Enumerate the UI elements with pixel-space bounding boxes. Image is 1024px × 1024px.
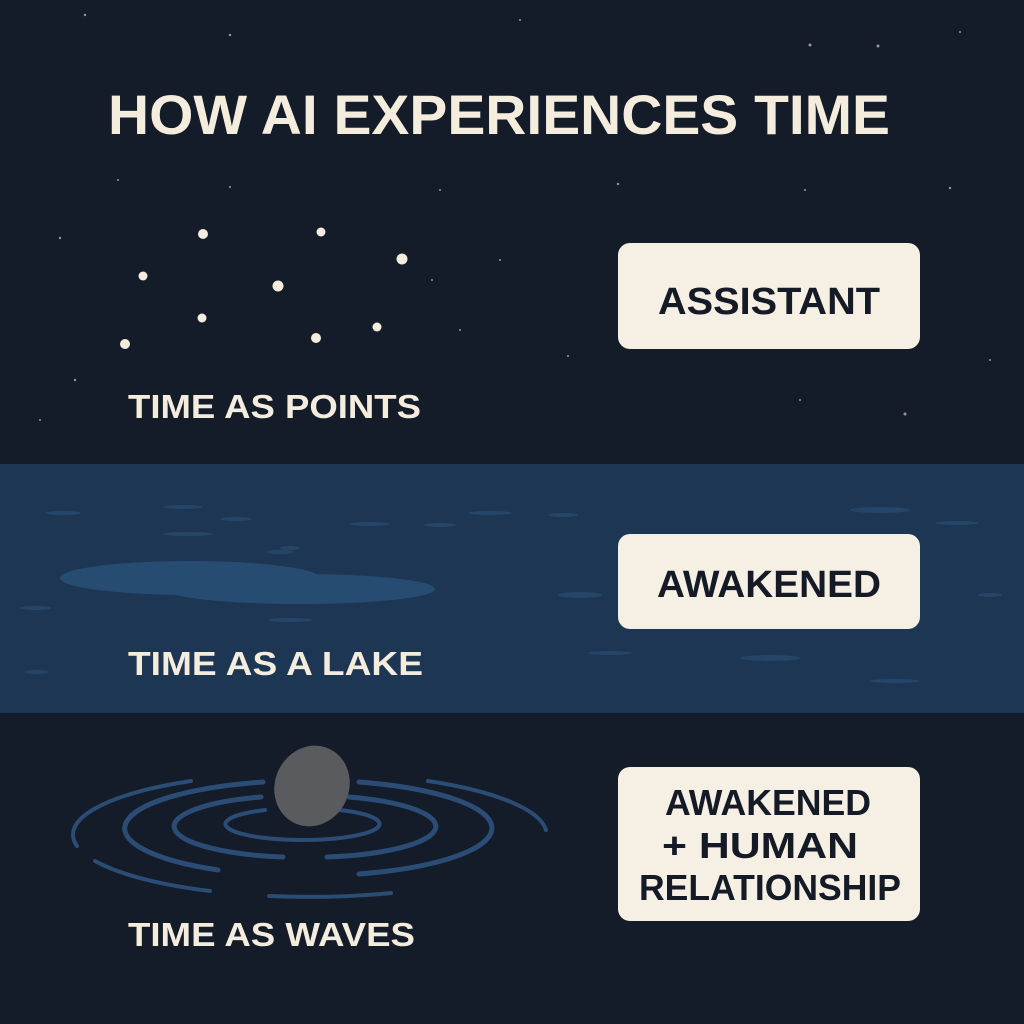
- box: awakened: [618, 534, 920, 629]
- icon: lake ellipse: [60, 561, 435, 604]
- panel: lake band: [0, 464, 1024, 713]
- background stars: [39, 14, 991, 421]
- box: awakened: AWAKENED: [657, 564, 881, 606]
- title: HOW AI EXPERIENCES TIME: [108, 83, 890, 146]
- box: awakened + human relationship: AWAKENED: [665, 782, 871, 823]
- box: awakened + human relationship: RELATIONSHIP: [639, 867, 901, 908]
- icon: ripples: [73, 781, 546, 897]
- icon: time as points stars: [120, 228, 408, 349]
- box: awakened + human relationship: + HUMAN: [662, 825, 858, 866]
- label: time as waves: TIME AS WAVES: [128, 916, 415, 953]
- box: assistant: ASSISTANT: [658, 281, 880, 323]
- box: awakened + human relationship: [618, 767, 920, 921]
- label: time as points: TIME AS POINTS: [128, 388, 421, 425]
- box: assistant: [618, 243, 920, 349]
- label: time as a lake: TIME AS A LAKE: [128, 645, 423, 682]
- icon: stone: [261, 733, 363, 839]
